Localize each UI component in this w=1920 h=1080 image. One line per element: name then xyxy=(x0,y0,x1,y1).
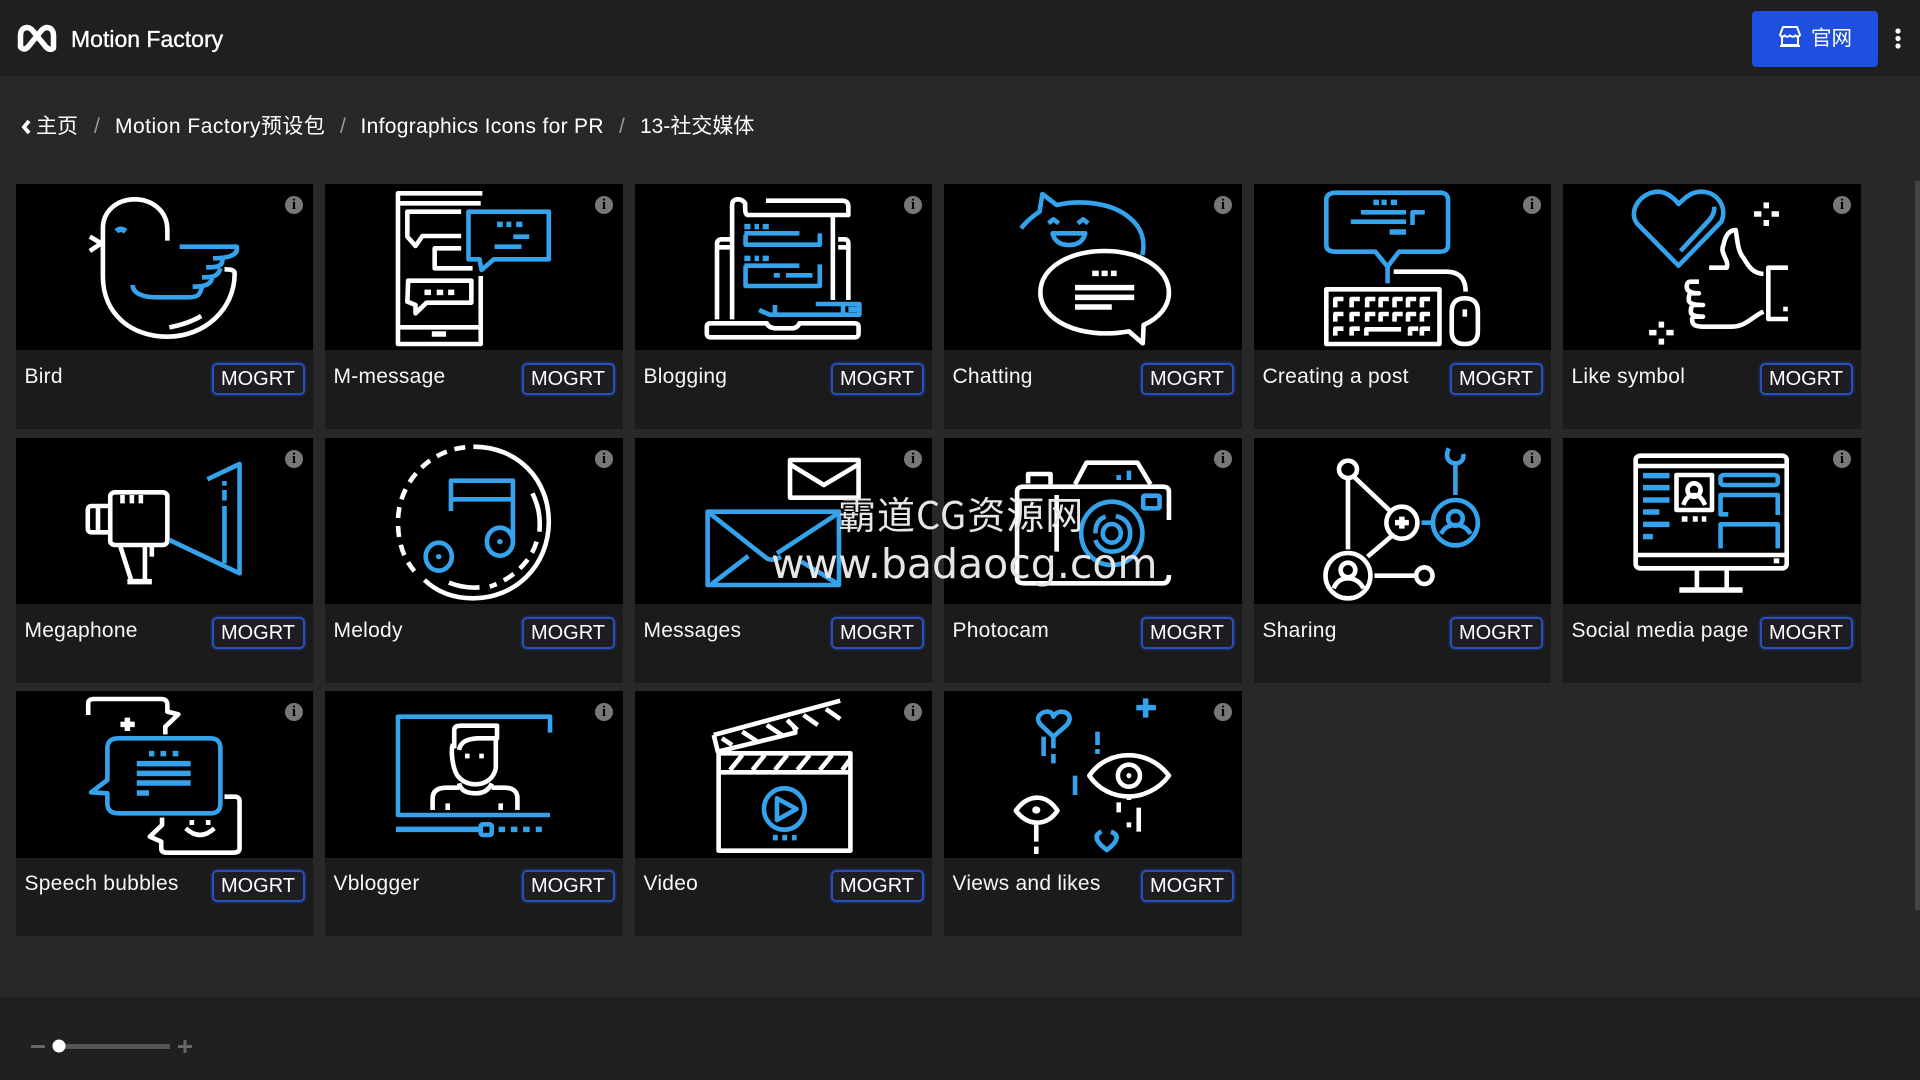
info icon: i xyxy=(1840,451,1844,467)
MOGRT badge xyxy=(212,870,304,902)
info icon xyxy=(904,703,922,721)
info icon xyxy=(595,450,613,468)
MOGRT badge xyxy=(830,363,924,395)
icon: store xyxy=(1778,26,1802,47)
MOGRT badge xyxy=(1140,617,1234,649)
icon: bird xyxy=(16,184,313,350)
MOGRT badge xyxy=(1450,617,1542,649)
MOGRT badge: MOGRT xyxy=(840,368,914,390)
card: Views and likes xyxy=(944,691,1242,936)
watermark title: 霸道CG资源网 xyxy=(838,485,1084,540)
MOGRT badge xyxy=(212,363,304,395)
card: Like symbol xyxy=(1563,184,1861,429)
info icon: i xyxy=(292,704,296,720)
watermark xyxy=(771,485,1157,588)
label: Like symbol xyxy=(1572,365,1685,388)
MOGRT badge: MOGRT xyxy=(1459,368,1533,390)
icon: keyboard and post bubble xyxy=(1254,184,1551,350)
card: Video xyxy=(635,691,932,936)
info icon xyxy=(595,703,613,721)
icon: monitor with profile xyxy=(1563,438,1861,604)
card: Vblogger xyxy=(325,691,623,936)
scrollbar xyxy=(1915,181,1920,910)
MOGRT badge xyxy=(1760,617,1852,649)
info icon: i xyxy=(292,197,296,213)
MOGRT badge xyxy=(522,870,614,902)
MOGRT badge: MOGRT xyxy=(531,368,605,390)
icon: envelopes xyxy=(635,438,932,604)
card: Photocam xyxy=(944,438,1242,683)
info icon xyxy=(1523,450,1541,468)
info icon xyxy=(904,196,922,214)
label: M-message xyxy=(334,365,445,388)
info icon xyxy=(1214,196,1232,214)
label: Bird xyxy=(24,365,63,388)
button label: 官网 xyxy=(1811,27,1852,50)
label: Blogging xyxy=(644,365,727,388)
card: Chatting xyxy=(944,184,1242,429)
icon: speech bubbles xyxy=(16,691,313,858)
label: Views and likes xyxy=(952,872,1101,895)
info icon xyxy=(1833,450,1851,468)
top header bar xyxy=(0,0,1920,76)
MOGRT badge: MOGRT xyxy=(1769,622,1843,644)
card: Social media page xyxy=(1563,438,1861,683)
official site button xyxy=(1752,11,1878,67)
info icon: i xyxy=(1530,197,1534,213)
MOGRT badge xyxy=(1140,363,1234,395)
MOGRT badge xyxy=(212,617,304,649)
card: Megaphone xyxy=(16,438,313,683)
MOGRT badge: MOGRT xyxy=(840,875,914,897)
card: Bird xyxy=(16,184,313,429)
info icon: i xyxy=(602,451,606,467)
icon: sharing network xyxy=(1254,438,1551,604)
MOGRT badge: MOGRT xyxy=(1459,622,1533,644)
info icon xyxy=(1523,196,1541,214)
breadcrumb: / xyxy=(94,115,100,138)
info icon xyxy=(285,196,303,214)
label: Speech bubbles xyxy=(24,872,179,895)
zoom slider xyxy=(31,1040,192,1053)
icon: blogging laptop xyxy=(635,184,932,350)
label: Video xyxy=(644,872,698,895)
info icon: i xyxy=(1840,197,1844,213)
MOGRT badge: MOGRT xyxy=(531,875,605,897)
label: Megaphone xyxy=(24,619,138,642)
breadcrumb: / xyxy=(340,115,346,138)
icon: camera xyxy=(944,438,1242,604)
label: Vblogger xyxy=(334,872,420,895)
brand name: Motion Factory xyxy=(71,26,223,52)
icon: Motion Factory logo xyxy=(18,24,56,52)
info icon: i xyxy=(602,704,606,720)
card: M-message xyxy=(325,184,623,429)
icon: mobile message xyxy=(325,184,623,350)
MOGRT badge: MOGRT xyxy=(1150,368,1224,390)
MOGRT badge xyxy=(1760,363,1852,395)
info icon: i xyxy=(1221,451,1225,467)
card: Creating a post xyxy=(1254,184,1551,429)
MOGRT badge: MOGRT xyxy=(1150,875,1224,897)
info icon xyxy=(595,196,613,214)
info icon xyxy=(1214,703,1232,721)
info icon: i xyxy=(1221,197,1225,213)
MOGRT badge: MOGRT xyxy=(531,622,605,644)
info icon: i xyxy=(911,451,915,467)
icon: clapperboard xyxy=(635,691,932,858)
label: Creating a post xyxy=(1262,365,1409,388)
icon: more menu xyxy=(1895,28,1901,49)
crumb: presets: Motion Factory预设包 xyxy=(115,115,325,138)
crumb: current: 13-社交媒体 xyxy=(640,115,754,138)
breadcrumb xyxy=(22,114,754,138)
MOGRT badge: MOGRT xyxy=(840,622,914,644)
info icon: i xyxy=(1530,451,1534,467)
label: Messages xyxy=(644,619,741,642)
MOGRT badge xyxy=(522,363,614,395)
info icon xyxy=(285,450,303,468)
label: Sharing xyxy=(1262,619,1337,642)
info icon: i xyxy=(602,197,606,213)
card: Messages xyxy=(635,438,932,683)
MOGRT badge xyxy=(1140,870,1234,902)
icon: vlogger on screen xyxy=(325,691,623,858)
card: Sharing xyxy=(1254,438,1551,683)
info icon: i xyxy=(292,451,296,467)
label: Social media page xyxy=(1572,619,1749,642)
MOGRT badge: MOGRT xyxy=(1769,368,1843,390)
label: Chatting xyxy=(952,365,1033,388)
info icon: i xyxy=(1221,704,1225,720)
MOGRT badge: MOGRT xyxy=(221,875,295,897)
label: Photocam xyxy=(952,619,1049,642)
label: Melody xyxy=(334,619,403,642)
breadcrumb: / xyxy=(619,115,625,138)
footer bar xyxy=(0,997,1920,1080)
MOGRT badge: MOGRT xyxy=(221,368,295,390)
icon: eyes and hearts xyxy=(944,691,1242,858)
MOGRT badge xyxy=(522,617,614,649)
icon: music note in circle xyxy=(325,438,623,604)
crumb: home: 主页 xyxy=(36,115,78,138)
info icon xyxy=(1833,196,1851,214)
info icon xyxy=(904,450,922,468)
MOGRT badge xyxy=(1450,363,1542,395)
icon: chatting bubbles xyxy=(944,184,1242,350)
card: Melody xyxy=(325,438,623,683)
MOGRT badge: MOGRT xyxy=(221,622,295,644)
icon: megaphone xyxy=(16,438,313,604)
crumb: pack: Infographics Icons for PR xyxy=(360,115,604,138)
info icon xyxy=(285,703,303,721)
MOGRT badge xyxy=(830,870,924,902)
info icon xyxy=(1214,450,1232,468)
icon: heart and thumb up xyxy=(1563,184,1861,350)
MOGRT badge xyxy=(830,617,924,649)
icon: back chevron xyxy=(22,120,30,134)
watermark url: www.badaocg.com xyxy=(771,540,1157,588)
info icon: i xyxy=(911,704,915,720)
info icon: i xyxy=(911,197,915,213)
card: Speech bubbles xyxy=(16,691,313,936)
card: Blogging xyxy=(635,184,932,429)
MOGRT badge: MOGRT xyxy=(1150,622,1224,644)
